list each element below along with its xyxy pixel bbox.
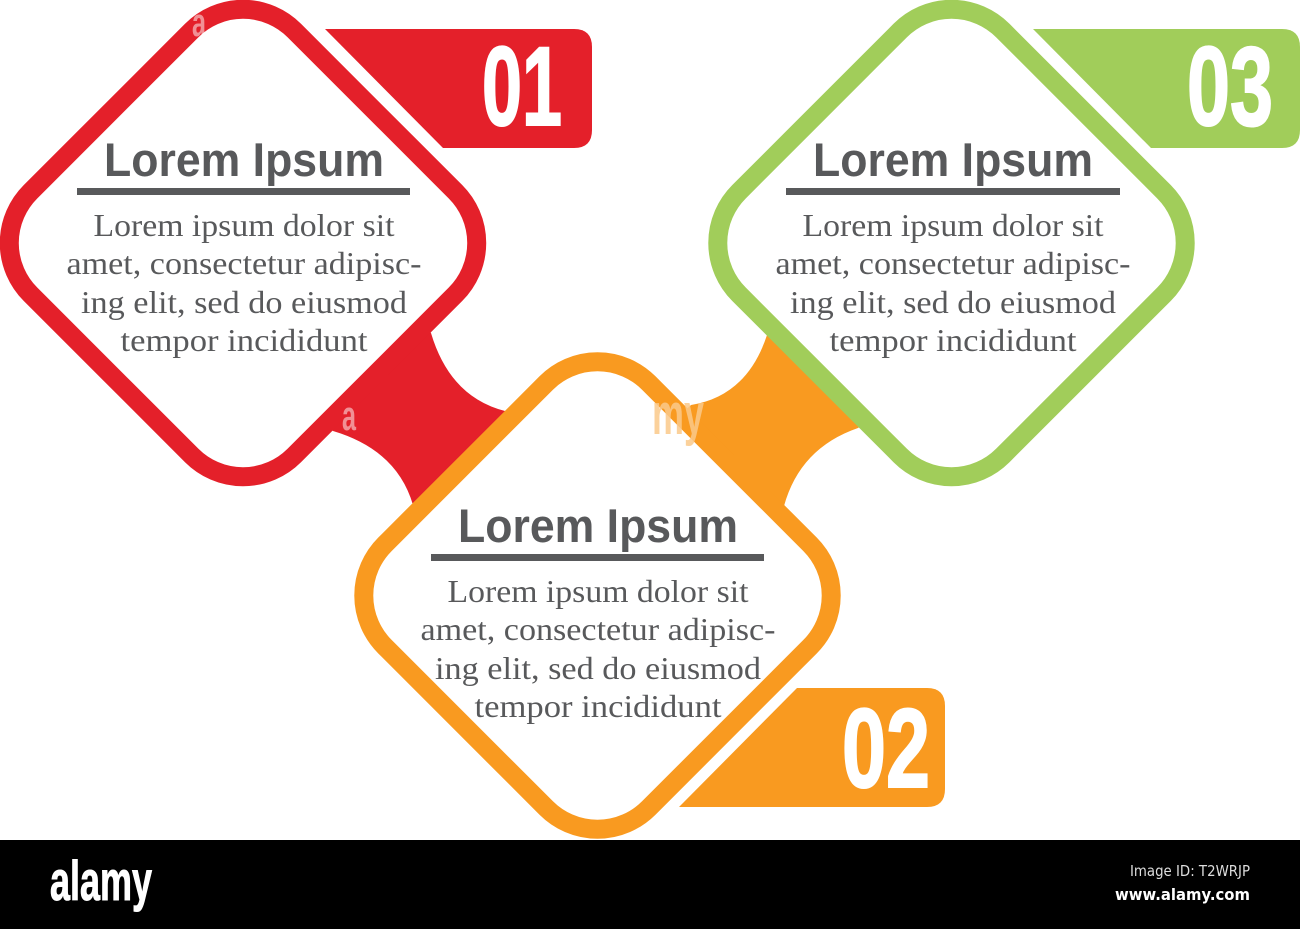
- number tab 02: [679, 686, 945, 811]
- watermark fragments: a: [192, 1, 206, 45]
- text block: step 3: amet, consectetur adipisc-: [776, 246, 1130, 281]
- text block: step 1: amet, consectetur adipisc-: [66, 246, 422, 281]
- connector: orange band between steps 2 and 3: [675, 322, 875, 515]
- footer logo: alamy: alamy: [50, 849, 152, 912]
- text block: step 2: Lorem ipsum dolor sit: [448, 574, 749, 609]
- watermark fragments: a: [342, 392, 356, 439]
- text block: step 2: ing elit, sed do eiusmod: [435, 651, 761, 686]
- footer text: image id: Image ID: T2WRJP: [1130, 862, 1250, 880]
- watermark fragments: [192, 1, 704, 447]
- heading: step 2: Lorem Ipsum: [458, 499, 738, 552]
- number tab 01: 01: [482, 24, 562, 149]
- text block: step 1: Lorem ipsum dolor sit: [94, 208, 395, 243]
- text block: step 3: Lorem ipsum dolor sit: [802, 208, 1104, 243]
- panel: step 3: [688, 0, 1215, 507]
- footer bar: [0, 840, 1300, 929]
- text block: step 1: ing elit, sed do eiusmod: [81, 285, 407, 320]
- text block: step 1: tempor incididunt: [120, 323, 368, 358]
- text block: step 3: ing elit, sed do eiusmod: [790, 285, 1116, 320]
- watermark fragments: my: [652, 382, 704, 447]
- number tab 02: 02: [842, 686, 930, 811]
- text block: step 2: [420, 574, 776, 724]
- panel: step 1: [0, 0, 507, 507]
- number tab 03: [1033, 24, 1300, 149]
- text block: step 2: tempor incididunt: [474, 689, 722, 724]
- text block: step 3: tempor incididunt: [830, 323, 1077, 358]
- text block: step 2: amet, consectetur adipisc-: [420, 612, 776, 647]
- panel: step 2: [334, 332, 861, 859]
- connector: red band between steps 1 and 2: [320, 320, 520, 520]
- text block: step 3: [776, 208, 1130, 358]
- footer text: website: www.alamy.com: [1115, 885, 1250, 904]
- heading: step 3: Lorem Ipsum: [813, 133, 1093, 186]
- number tab 01: [325, 24, 592, 149]
- text block: step 1: [66, 208, 422, 358]
- heading: step 1: Lorem Ipsum: [104, 133, 384, 186]
